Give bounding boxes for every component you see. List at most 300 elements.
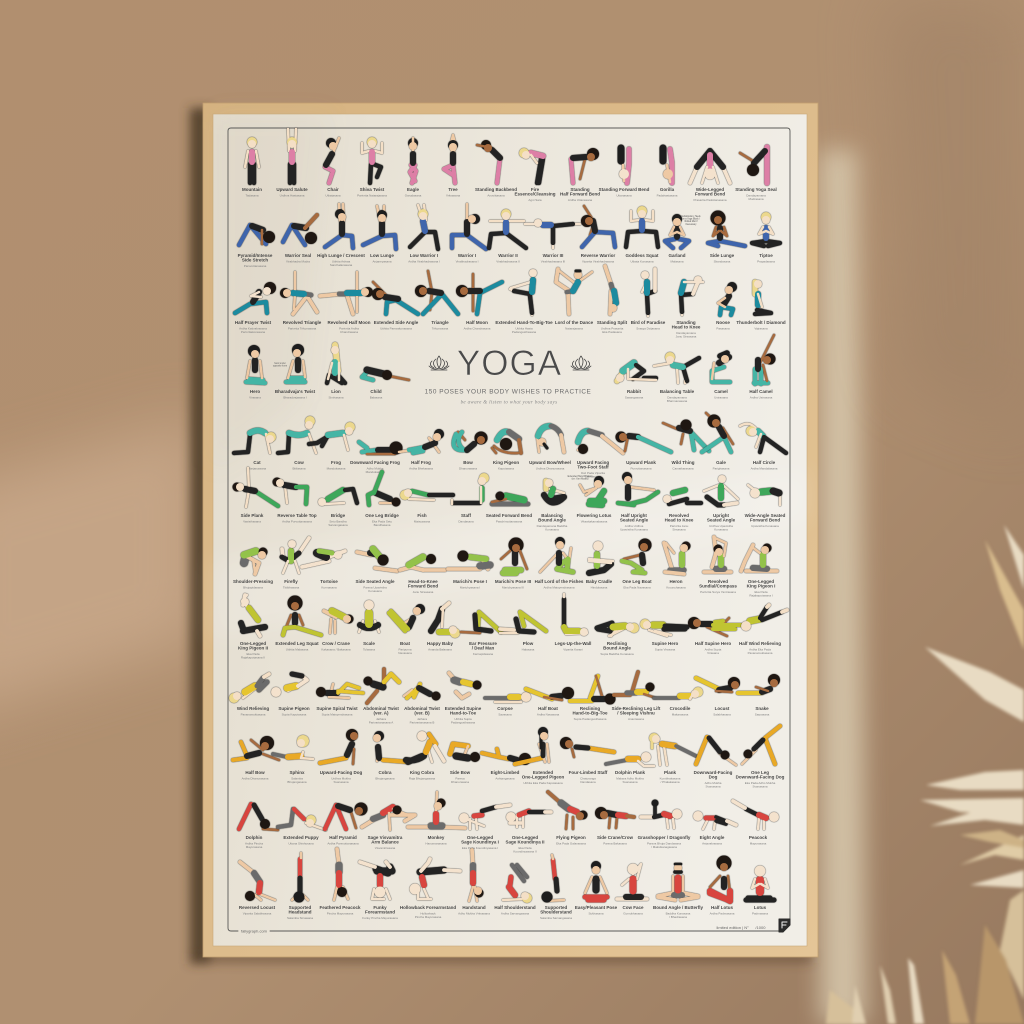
pose: Upright Seated Angle: Urdhva Upavistha	[709, 524, 733, 528]
pose: Extended Side Angle	[372, 282, 419, 330]
pose: Thunderbolt / Diamond: Thunderbolt / Diamond	[736, 320, 786, 325]
pose: Side Seated Angle: Side Seated Angle	[355, 579, 395, 584]
pose: Standing Yoga Seal	[735, 147, 777, 201]
pose: Warrior I	[452, 204, 486, 264]
pose: Eight-Limbed	[482, 749, 531, 780]
pose: Sphinx: Salamba	[291, 776, 303, 780]
pose: Locust: Salabhasana	[713, 712, 731, 716]
pose: Sage Visvamitra Arm Balance: Arm Balance	[371, 840, 399, 845]
pose: Mountain: Mountain	[242, 187, 262, 192]
pose: Side Crane/Crow	[595, 807, 634, 846]
pose: Upward-Facing Dog: Upward-Facing Dog	[320, 770, 363, 775]
pose: Supine Hero	[640, 619, 687, 652]
pose: Abdominal Twist (ver. A)	[363, 669, 399, 724]
pose: Warrior III: Warrior III	[543, 253, 563, 258]
pose: Chair: Utkatasana	[325, 194, 341, 198]
pose: Eagle: Eagle	[407, 187, 419, 192]
pose: Half Bow: Half Bow	[245, 770, 265, 775]
pose: Wild Thing: Camatkarasana	[672, 466, 694, 470]
pose: Bow	[454, 432, 488, 470]
pose: Reverse Table Top: Reverse Table Top	[277, 513, 317, 518]
pose: Standing Split	[597, 266, 628, 334]
pose: Half Circle: Ardha Mandalasana	[751, 466, 778, 470]
pose: One-Legged King Pigeon II: One-Legged	[240, 641, 266, 646]
pose: Mountain: Tadasana	[245, 194, 259, 198]
pose: Abdominal Twist (ver. A): (ver. A)	[373, 711, 389, 716]
pose: Half Wind Relieving: Pavanamuktasana	[748, 651, 773, 655]
row 2: blue poses	[238, 204, 780, 268]
note: Flowering Lotus: Extended Hand Position	[568, 475, 593, 478]
pose: One Leg Boat	[622, 538, 652, 590]
pose: Legs-Up-the-Wall	[555, 594, 591, 652]
pose: Extended Supine Hand-to-Toe: Padangusthasana	[451, 720, 475, 724]
pose: Upward Salute: Urdhva Hastasana	[280, 194, 305, 198]
pose: Marichi's Pose I	[448, 550, 490, 590]
pose: Supported Shoulderstand: Shoulderstand	[540, 910, 572, 915]
pose: Cobra: Cobra	[378, 770, 392, 775]
pose: Standing Forward Bend: Uttanasana	[616, 194, 632, 198]
pose: King Pigeon: Kapotasana	[498, 466, 514, 470]
pose: Half Upright Seated Angle: Half Upright	[621, 513, 647, 518]
pose: Hollowback Forearmstand: Hollowback Forearmstand	[400, 905, 456, 910]
pose: Reclining Hand-to-Big-Toe: Supta Padangusthasana	[574, 717, 607, 721]
pose: One-Legged King Pigeon I: King Pigeon I	[747, 584, 775, 589]
pose: Half Prayer Twist: Ardha Kativakrasana	[239, 326, 267, 330]
pose: One Leg Bridge: One Leg Bridge	[365, 513, 399, 518]
pose: Gale: Gale	[716, 460, 726, 465]
pose: Warrior Seal: Warrior Seal	[285, 253, 311, 258]
pose: Marichi's Pose III	[495, 538, 531, 590]
pose: Baby Cradle	[586, 541, 613, 590]
pose: Grasshopper / Dragonfly: Parsva Bhuja Dandasana	[647, 842, 681, 846]
pose: Shoulder-Pressing	[233, 548, 273, 590]
pose: Standing Half Forward Bend: Half Forward Bend	[560, 192, 600, 197]
pose: Revolved Half Moon: Chandrasana	[340, 330, 358, 334]
pose: Standing Backbend	[475, 140, 517, 198]
pose: Reverse Warrior	[581, 206, 616, 264]
pose: Locust: Locust	[715, 706, 730, 711]
pose: Half Lotus	[710, 856, 735, 916]
pose: Corpse	[485, 692, 531, 716]
pose: Gorilla: Gorilla	[660, 187, 675, 192]
pose: Triangle: Triangle	[431, 320, 449, 325]
pose: Supine Spiral Twist: Supine Spiral Twist	[316, 706, 358, 711]
note: Garland substitution: on a Yoga Block /	[682, 219, 700, 221]
pose: High Lunge / Crescent: Sanchalanasana	[330, 263, 353, 267]
pose: Tortoise: Tortoise	[320, 579, 338, 584]
pose: Chair	[325, 138, 341, 198]
pose: Seated Forward Bend: Paschimottanasana	[496, 520, 523, 524]
pose: Half Moon	[456, 274, 502, 330]
pose: Abdominal Twist (ver. B): (ver. B)	[414, 711, 430, 716]
pose: Eagle: Garudasana	[405, 194, 422, 198]
pose: Lord of the Dance: Natarajasana	[565, 326, 583, 330]
pose: Balancing Bound Angle: Konasana	[545, 528, 559, 532]
pose: Half Frog: Ardha Bhekasana	[409, 466, 433, 470]
row 1: pink poses	[242, 129, 777, 202]
pose: Wide-Angle Seated Forward Bend: Upavistha Konasana	[751, 524, 779, 528]
pose: Gale	[702, 413, 733, 470]
pose: Bridge: Setu Bandha	[329, 520, 347, 524]
pose: Supine Pigeon: Supine Pigeon	[278, 706, 310, 711]
footer website: fallygraph.com	[241, 928, 268, 934]
pose: Fish: Fish	[417, 513, 427, 518]
pose: King Pigeon	[492, 432, 521, 470]
pose: Side Crane/Crow: Parsva Bakasana	[603, 842, 627, 846]
pose: Tiptoe: Prapadasana	[757, 260, 775, 264]
pose: Side Plank: Side Plank	[241, 513, 264, 518]
pose: Firefly: Firefly	[284, 579, 298, 584]
pose: Upward Bow/Wheel	[529, 426, 571, 470]
pose: Scale: Tolasana	[363, 648, 375, 652]
pose: Fire Essence / Cleansing: Essence/Cleansing	[514, 192, 556, 197]
pose: Revolved Head to Knee: Parivrtta Janu	[670, 524, 689, 528]
pose: Standing Split: Urdhva Prasarita	[601, 326, 624, 330]
pose: Abdominal Twist (ver. B): Abdominal Twist	[404, 706, 440, 711]
pose: Wide-Legged Forward Bend: Forward Bend	[695, 192, 725, 197]
pose: Standing Split: Eka Padasana	[602, 330, 622, 334]
pose: Standing Head to Knee: Dandayamana	[676, 331, 696, 335]
pose: Chair: Chair	[327, 187, 339, 192]
pose: Scale: Scale	[363, 641, 375, 646]
pose: Half Upright Seated Angle	[618, 472, 658, 532]
pose: Rabbit: Rabbit	[627, 389, 642, 394]
pose: Marichi's Pose I: Marichyasana I	[460, 586, 480, 590]
pose: Bow: Dhanurasana	[459, 466, 477, 470]
pose: Warrior II	[489, 209, 526, 264]
pose: Upward Plank	[616, 432, 671, 470]
pose: Lion: Lion	[331, 389, 341, 394]
pose: Sphinx	[273, 735, 313, 784]
pose: Side Plank: Vasisthasana	[243, 520, 261, 524]
pose: Revolved Sundial / Compass: Revolved	[708, 579, 728, 584]
pose: King Cobra	[406, 731, 444, 780]
pose: Pyramid / Intense Side Stretch: Side Stretch	[242, 258, 268, 263]
pose: Reclining Hand-to-Big-Toe	[570, 676, 616, 721]
pose: Upright Seated Angle	[704, 475, 738, 532]
pose: Reverse Table Top	[272, 478, 317, 524]
paper light and shadow	[213, 114, 807, 640]
pose: Child: Child	[370, 389, 382, 394]
pose: Upward Facing Two-Foot Staff: Two-Foot Staff	[577, 465, 609, 470]
logo	[779, 919, 790, 932]
pose: Upward Bow/Wheel: Upward Bow/Wheel	[529, 460, 571, 465]
pose: One Leg Bridge: Eka Pada Setu	[372, 520, 392, 524]
pose: Shoulder-Pressing: Bhujapidasana	[243, 586, 263, 590]
pose: Side-Reclining Leg Lift: Anantasana	[628, 717, 644, 721]
pose: Balancing Table: Balancing Table	[660, 389, 695, 394]
pose: Flowering Lotus: Vikasitakamalasana	[581, 520, 608, 524]
pose: Corpse: Corpse	[497, 706, 513, 711]
pose: Easy/Pleasant Pose: Sukhasana	[588, 912, 604, 916]
pose: Reversed Locust: Reversed Locust	[239, 905, 276, 910]
pose: Half Supine Hero: Virasana	[707, 651, 719, 655]
pose: One-Legged King Pigeon II: Rajakapotasana II	[241, 656, 265, 660]
pose: Side-Reclining Leg Lift	[612, 672, 661, 721]
pose: Plow: Halasana	[522, 648, 535, 652]
pose: Cow	[278, 416, 316, 470]
pose: Plow	[500, 612, 546, 652]
pose: Half Pyramid: Half Pyramid	[329, 835, 357, 840]
pose: Bird of Paradise	[631, 269, 666, 330]
pose: Feathered Peacock: Feathered Peacock	[319, 905, 361, 910]
pose: Thunderbolt / Diamond	[736, 280, 786, 330]
pose: Lotus	[746, 866, 774, 916]
pose: Bound Angle / Butterfly	[653, 864, 704, 919]
pose: Abdominal Twist (ver. B): Parivartanasana B	[410, 720, 434, 724]
pose: Shiva Twist: Shiva Twist	[360, 187, 385, 192]
pose: Side Lunge: Skandasana	[714, 260, 731, 264]
pose: Revolved Head to Knee: Head to Knee	[665, 518, 694, 523]
pose: Firefly	[282, 538, 309, 590]
pose: Half Shoulderstand: Half Shoulderstand	[494, 905, 536, 910]
pose: Funky Forearmstand: Funky Pincha Mayurasana	[362, 916, 398, 920]
pose: Funky Forearmstand	[360, 862, 398, 920]
pose: One Leg Downward-Facing Dog: One Leg	[751, 770, 769, 775]
pose: Reclining Bound Angle: Supta Baddha Konasana	[600, 652, 634, 656]
pose: Camel: Camel	[714, 389, 728, 394]
pose: Supine Hero: Supine Hero	[652, 641, 678, 646]
pose: Abdominal Twist (ver. B)	[404, 684, 440, 724]
pose: Bharadvaja's Twist: Bharadvaja's Twist	[275, 389, 316, 394]
pose: Sage Visvamitra Arm Balance	[362, 806, 415, 850]
pose: Standing Yoga Seal: Standing Yoga Seal	[735, 187, 777, 192]
pose: Low Lunge: Anjaneyasana	[372, 260, 392, 264]
row 5: aqua poses	[234, 413, 786, 478]
pose: One-Legged King Pigeon I: Rajakapotasana I	[749, 594, 773, 598]
pose: Side Bow	[450, 744, 480, 784]
pose: Shoulder-Pressing: Shoulder-Pressing	[233, 579, 273, 584]
pose: Noose: Noose	[716, 320, 730, 325]
row 7: lime poses	[233, 537, 777, 598]
pose: Easy/Pleasant Pose: Easy/Pleasant Pose	[575, 905, 618, 910]
pose: One-Legged Sage Koundinya II: Sage Koundinya II	[505, 840, 545, 845]
pose: Standing Head to Knee: Janu Sirsasana	[676, 334, 697, 338]
pose: Flying Pigeon	[548, 792, 588, 846]
pose: Flowering Lotus: Flowering Lotus	[577, 513, 612, 518]
pose: Snake	[738, 674, 780, 716]
pose: Revolved Head to Knee: Revolved	[669, 513, 689, 518]
pose: Half Pyramid: Ardha Parsvottanasana	[327, 842, 359, 846]
pose: Revolved Head to Knee: Sirsasana	[672, 528, 686, 532]
pose: Staff: Dandasana	[458, 520, 474, 524]
pose: Standing Half Forward Bend	[560, 148, 600, 202]
pose: Downward Facing Frog: Adho Mukha	[367, 466, 384, 470]
pose: Camel: Ustrasana	[714, 396, 728, 400]
pose: Standing Yoga Seal: Dandayamana	[746, 194, 766, 198]
row 4: aqua poses left	[246, 335, 776, 403]
pose: Easy/Pleasant Pose	[575, 861, 618, 916]
pose: Pyramid / Intense Side Stretch	[238, 225, 275, 268]
pose: Crow / Crane	[321, 611, 354, 652]
pose: Marichi's Pose III: Marichi's Pose III	[495, 579, 531, 584]
pose: One-Legged Sage Koundinya I: One-Legged	[467, 835, 493, 840]
pose: Fire Essence / Cleansing: Fire	[531, 187, 540, 192]
pose: Bound Angle / Butterfly: Bound Angle / Butterfly	[653, 905, 704, 910]
pose: Cobra	[373, 731, 409, 780]
pose: Shiva Twist	[357, 137, 387, 198]
pose: Side Seated Angle: Konasana	[368, 589, 382, 593]
pose: Downward-Facing Dog: Svanasana	[705, 784, 721, 788]
icon: lotus right	[571, 356, 591, 370]
pose: Upward Facing Two-Foot Staff: Dandasana	[585, 474, 601, 478]
pose: Flying Pigeon: Flying Pigeon	[556, 835, 586, 840]
pose: Half Prayer Twist	[235, 282, 276, 334]
pose: Standing Split: Standing Split	[597, 320, 628, 325]
pose: Warrior II: Warrior II	[498, 253, 518, 258]
pose: Ear Pressure / Deaf Man: Ear Pressure	[469, 641, 497, 646]
pose: One-Legged Sage Koundinya II	[505, 811, 551, 854]
pose: Boat: Paripurna	[398, 648, 412, 652]
pose: Heron: Heron	[669, 579, 683, 584]
pose: Dolphin	[239, 804, 278, 849]
pose: Gorilla	[657, 148, 678, 198]
pose: One-Legged Sage Koundinya II: Eka Pada	[518, 846, 532, 850]
pose: Snake: Snake	[755, 706, 769, 711]
pose: Triangle	[415, 271, 458, 330]
pose: Funky Forearmstand: Funky	[373, 905, 387, 910]
pose: Reclining Bound Angle: Reclining	[607, 641, 627, 646]
pose: Noose: Pasasana	[716, 326, 730, 330]
pose: King Cobra: King Cobra	[410, 770, 435, 775]
pose: Supported Headstand: Salamba Sirsasana	[287, 916, 313, 920]
pose: One-Legged King Pigeon II	[238, 595, 268, 660]
pose: Marichi's Pose I: Marichi's Pose I	[453, 579, 487, 584]
pose: Revolved Half Moon: Parivrtta Ardha	[339, 326, 359, 330]
pose: Thunderbolt / Diamond: Vajrasana	[754, 326, 768, 330]
pose: Supported Shoulderstand: Salamba Sarvangasana	[540, 916, 572, 920]
pose: Lion	[327, 345, 345, 400]
pose: Grasshopper / Dragonfly	[638, 800, 691, 849]
pose: Extended Supine Hand-to-Toe: Extended Supine	[445, 706, 482, 711]
pose: Upward-Facing Dog: Svanasana	[333, 780, 349, 784]
pose: Cow Face: Gomukhasana	[623, 912, 643, 916]
pose: Half Supine Hero	[688, 617, 741, 655]
icon: lotus left	[429, 356, 449, 370]
pose: Balancing Bound Angle	[537, 479, 568, 532]
pose: Goddess Squat: Goddess Squat	[625, 253, 659, 258]
pose: Standing Yoga Seal: Mudrasana	[748, 197, 764, 201]
pose: Half Camel: Half Camel	[749, 389, 773, 394]
pose: Half Bow: Ardha Dhanurasana	[242, 776, 269, 780]
pose: Crow / Crane: Kakasana / Bakasana	[321, 648, 351, 652]
pose: Cat: Marjaryasana	[248, 466, 266, 470]
pose: Bharadvaja's Twist: Bharadvajasana I	[283, 396, 307, 400]
pose: Warrior III: Virabhadrasana III	[541, 260, 565, 264]
pose: Revolved Triangle: Parivrtta Trikonasana	[288, 326, 316, 330]
pose: Bridge: Sarvangasana	[328, 523, 348, 527]
pose: Upright Seated Angle: Konasana	[714, 528, 728, 532]
pose: Standing Head to Knee: Head to Knee	[672, 325, 701, 330]
pose: Upright Seated Angle: Upright	[713, 513, 729, 518]
pose: Abdominal Twist (ver. B): Jathara	[417, 717, 427, 721]
pose: Hollowback Forearmstand: Hollowback	[420, 912, 436, 916]
pose: Head-to-Knee Forward Bend: Head-to-Knee	[408, 579, 438, 584]
pose: Frog: Frog	[331, 460, 341, 465]
pose: Rabbit	[616, 363, 656, 400]
poster drop shadow	[190, 108, 812, 964]
pose: Revolved Triangle: Revolved Triangle	[283, 320, 322, 325]
pose: Half Prayer Twist: Parivrttakonasana	[241, 330, 265, 334]
pose: Hero	[246, 345, 265, 400]
pose: Extended One-Legged Pigeon: Extended	[533, 770, 553, 775]
pose: Tortoise	[302, 551, 345, 590]
pose: Wind Relieving	[229, 674, 269, 716]
pose: Supine Hero: Supta Virasana	[655, 648, 676, 652]
pose: Side Seated Angle	[355, 549, 397, 593]
pose: One-Legged Sage Koundinya II: Koundinyasana II	[513, 850, 537, 854]
pose: Wide-Legged Forward Bend: Wide-Legged	[696, 187, 724, 192]
pose: Four-Limbed Staff	[560, 737, 614, 784]
pose: Plank: Kumbhakasana	[660, 776, 681, 780]
pose: Dolphin: Ardha Pincha	[245, 842, 263, 846]
pose: Cat: Cat	[253, 460, 261, 465]
pose: Monkey: Hanumanasana	[425, 842, 447, 846]
pose: Reverse Table Top: Ardha Purvottanasana	[282, 520, 312, 524]
pose: Extended One-Legged Pigeon: Utthita Eka Pada Kapotasana	[523, 781, 563, 785]
pose: Fire Essence / Cleansing	[514, 148, 556, 202]
pose: Upward Facing Two-Foot Staff	[577, 431, 623, 478]
pose: Revolved Half Moon: Revolved Half Moon	[327, 320, 371, 325]
footer edition: limited edition | N° /1000	[717, 925, 766, 930]
pose: Standing Half Forward Bend: Standing	[570, 187, 590, 192]
pose: High Lunge / Crescent	[317, 204, 365, 267]
pose: Feathered Peacock	[319, 849, 361, 916]
pose: Wide-Legged Forward Bend	[690, 151, 730, 202]
pose: Reverse Warrior: Viparita Virabhadrasana	[582, 260, 614, 264]
pose: Upward Facing Two-Foot Staff: Dwi Pada Viparita	[581, 471, 605, 475]
pose: One-Legged Sage Koundinya I	[459, 805, 510, 850]
pose: Revolved Triangle	[280, 272, 322, 330]
plant: dried palm leaves	[826, 525, 1024, 1024]
pose: One Leg Bridge	[365, 472, 400, 527]
pose: Supported Shoulderstand	[540, 855, 572, 920]
pose: Wide-Angle Seated Forward Bend: Forward Bend	[750, 518, 780, 523]
pose: Half Circle: Half Circle	[753, 460, 776, 465]
pose: One Leg Downward-Facing Dog	[736, 726, 785, 788]
pose: Side Bow: Side Bow	[450, 770, 471, 775]
pose: Eagle	[405, 138, 422, 198]
pose: Ear Pressure / Deaf Man: Karnapidasana	[473, 652, 493, 656]
pose: Reclining Hand-to-Big-Toe: Reclining	[580, 706, 600, 711]
pose: Heron	[664, 542, 690, 590]
pose: Half Lord of the Fishes: Half Lord of the Fishes	[535, 579, 584, 584]
pose: Feathered Peacock: Pincha Mayurasana	[327, 912, 354, 916]
pose: Tree: Vrksasana	[446, 194, 460, 198]
pose: Tiptoe: Tiptoe	[759, 253, 773, 258]
pose: Standing Backbend: Anuvittasana	[487, 194, 505, 198]
pose: Bharadvaja's Twist	[275, 344, 316, 400]
pose: Low Warrior I	[408, 205, 440, 264]
row 9: yellow poses	[229, 669, 780, 724]
wooden frame	[203, 103, 818, 957]
pose: Warrior Seal: Virabhadra Mudra	[286, 260, 310, 264]
pose: Lord of the Dance	[555, 269, 594, 330]
pose: Boat: Boat	[400, 641, 411, 646]
pose: Sphinx: Sphinx	[289, 770, 305, 775]
pose: Balancing Bound Angle: Dandayamana Baddha	[537, 524, 568, 528]
pose: Frog	[309, 422, 355, 470]
pose: Corpse: Savasana	[498, 712, 512, 716]
pose: Half Moon: Half Moon	[466, 320, 488, 325]
pose: Fire Essence / Cleansing: Agni Sara	[528, 198, 542, 202]
pose: Half Boat: Ardha Navasana	[537, 712, 559, 716]
pose: Upward-Facing Dog: Urdhva Mukha	[331, 776, 351, 780]
pose: Side-Reclining Leg Lift: Side-Reclining Leg Lift	[612, 706, 661, 711]
pose: Shiva Twist: Parivrtta Natarajasana	[357, 194, 387, 198]
pose: Crocodile	[654, 687, 703, 716]
pose: Extended Puppy: Extended Puppy	[283, 835, 319, 840]
